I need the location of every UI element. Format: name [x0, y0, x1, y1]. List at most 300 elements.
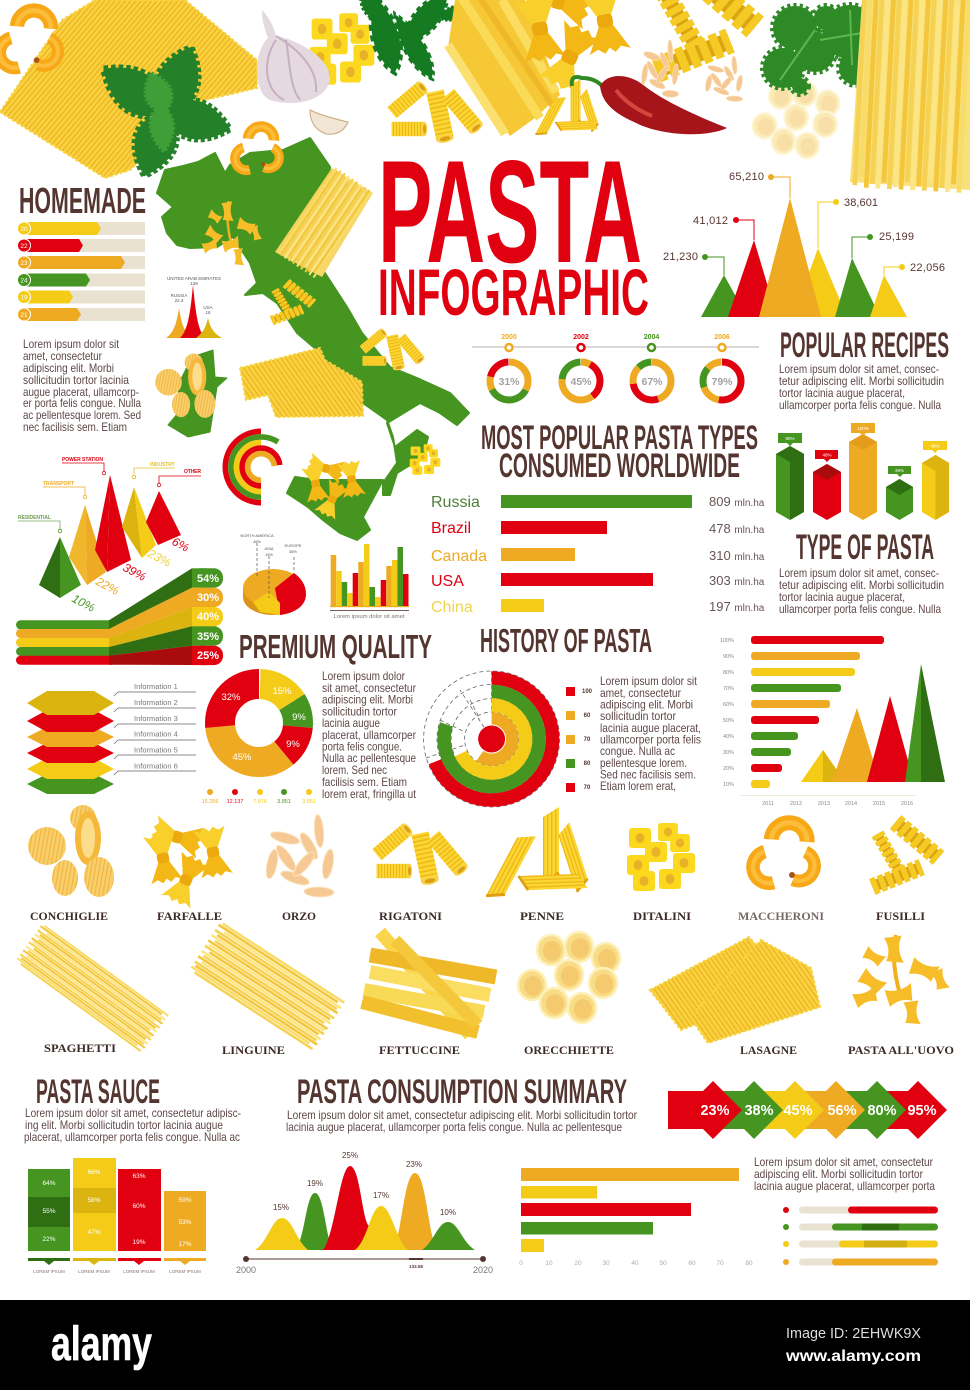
country values: 809 mln.ha [709, 494, 765, 509]
text block: tetur adipiscing elit. Morbi sollicitudin [779, 578, 944, 592]
text block: placerat, ullamcorper porta felis congue. Nulla ac [24, 1130, 240, 1144]
donut legend: 7.876 [253, 799, 267, 805]
chart: small country peaks: 22.3 [175, 298, 184, 303]
peak values: 65,210 [729, 171, 764, 183]
chart: donut percentages: 9% [292, 712, 306, 723]
fusilli on map [272, 283, 313, 321]
Sardinia [168, 350, 227, 437]
label: conchiglie: CONCHIGLIE [30, 909, 108, 923]
donut 2004 [633, 362, 671, 400]
chart: diamond arrows with percentages: 23% [700, 1102, 730, 1119]
chart: bell curves: 17% [373, 1191, 389, 1200]
map of Italy [155, 121, 469, 540]
progress arrows: 20 [20, 226, 28, 233]
label: pasta all'uovo: PASTA ALL'UOVO [848, 1043, 954, 1057]
percent axis: 80% [723, 670, 734, 676]
percent axis: 10% [723, 782, 734, 788]
icon: pasta all'uovo [852, 935, 950, 1026]
value tags [778, 423, 947, 477]
chart: horizontal bars [519, 1168, 753, 1267]
panel: popular recipes [779, 326, 949, 412]
lasagne sheets [0, 0, 257, 178]
icon: fusilli [872, 822, 938, 887]
text block: bottom right [754, 1155, 935, 1193]
mainland Italy [157, 138, 469, 495]
chart: small country peaks: 139 [190, 281, 198, 286]
label: orecchiette: ORECCHIETTE [524, 1043, 614, 1057]
text block: premium quality: lorem erat, fringilla ut [322, 787, 417, 801]
text block: history: Etiam lorem erat, [600, 779, 676, 793]
fettuccine top [448, 0, 560, 136]
text block: premium quality [322, 669, 417, 801]
chart: mountain peaks with values [663, 171, 945, 317]
pyramid percentages: 22% [93, 574, 122, 598]
text block [24, 1106, 241, 1144]
yellow pyramid [122, 487, 156, 558]
title: INFOGRAPHIC [378, 255, 649, 329]
text block: Lorem ipsum dolor sit amet, consectetur adipisc- [25, 1106, 241, 1120]
year axis: 2013 [818, 801, 830, 807]
progress arrows: 19 [20, 294, 28, 302]
text block [286, 1108, 637, 1134]
chart: timeline of small donuts: 2004 [644, 334, 659, 341]
title [378, 130, 649, 329]
chart: stacked columns: 66% [87, 1169, 101, 1176]
chart: stacked columns: 22% [42, 1236, 56, 1243]
radial legend: 70 [584, 785, 591, 791]
text block: premium quality: lacinia augue [322, 716, 380, 730]
chart: 3D pie: ASIA [264, 546, 274, 551]
peak values: 25,199 [879, 231, 914, 243]
text block: bottom right: Lorem ipsum dolor sit amet, consectetur [754, 1155, 933, 1169]
icon: farfalle [143, 815, 233, 909]
country values: 303 mln.ha [709, 573, 765, 588]
text block: ac pellentesque lorem. Sed [23, 408, 141, 422]
pyramid percentages: 10% [70, 591, 98, 615]
column tabs [28, 1258, 206, 1265]
icon: rigatoni [372, 822, 470, 886]
text block: ullamcorper porta felis congue. Nulla [779, 398, 941, 412]
donut percentages: 79% [711, 376, 733, 388]
percent axis: 60% [723, 702, 734, 708]
chart: horizontal bars: 60 [688, 1260, 696, 1267]
text block: history: ullamcorper porta felis [600, 732, 701, 746]
chart: 3D pie: 46% [253, 539, 261, 544]
chart: bell curves: 19% [307, 1179, 323, 1188]
donut 2002 [562, 362, 600, 400]
text block: history: sollicitudin tortor [600, 709, 676, 723]
chart: small country peaks: 16 [205, 310, 211, 315]
panel: pasta sauce [24, 1073, 241, 1274]
panel: pasta consumption summary [236, 1073, 637, 1275]
heading: most popular [481, 419, 758, 485]
text block: Lorem ipsum dolor sit amet, consectetur adipiscing elit. Morbi sollicitudin tortor [287, 1108, 637, 1122]
radial legend: 100 [582, 689, 593, 695]
chart: 3D pie [240, 533, 306, 615]
chart: column bars: Lorem ipsum dolor sit amet [334, 614, 405, 620]
value tags: 39% [895, 468, 904, 473]
icon: orzo [264, 814, 336, 898]
column labels: LOREM IPSUM [169, 1269, 201, 1274]
year axis: 2015 [873, 801, 885, 807]
chart: small country peaks: USA [203, 305, 213, 310]
percent axis: 20% [723, 766, 734, 772]
chart: 3D pie: NORTH AMERICA [240, 533, 274, 538]
text block: premium quality: Nulla ac pellentesque [322, 751, 416, 765]
percent axis: 30% [723, 750, 734, 756]
chart: isometric bars [776, 423, 949, 520]
chart: horizontal bars: 40 [631, 1260, 639, 1267]
chart: timeline of small donuts: 2000 [501, 334, 517, 341]
chart: donut percentages [202, 684, 316, 805]
text block: premium quality: Lorem ipsum dolor [322, 669, 405, 683]
chart: stacked converging bands: 40% [197, 611, 219, 623]
peak values: 41,012 [693, 215, 728, 227]
heading: consumption summary: PASTA CONSUMPTION SUMMARY [297, 1073, 627, 1111]
chart: timeline of small donuts [472, 334, 759, 400]
column labels [33, 1269, 201, 1274]
information labels: Information 1 [134, 682, 178, 691]
text block: Lorem ipsum dolor sit [23, 337, 120, 351]
donut percentages: 45% [570, 376, 592, 388]
chart: donut percentages: 9% [286, 739, 300, 750]
chart: concentric half rings [225, 431, 280, 503]
donut legend: 3.851 [302, 799, 316, 805]
conchiglie on Sardinia [155, 354, 215, 418]
chart: bell curves: 23% [406, 1160, 422, 1169]
information labels: Information 5 [134, 746, 178, 754]
triangles [801, 664, 945, 782]
footer logo: alamy [51, 1318, 152, 1371]
percent axis: 100% [720, 638, 734, 644]
text block: tortor lacinia augue placerat, [779, 590, 905, 604]
radial legend: 80 [584, 761, 591, 767]
chart: stacked columns [28, 1158, 206, 1274]
text block: history: adipiscing elit. Morbi [600, 698, 693, 712]
value tags: 100% [857, 426, 869, 431]
Sicily [287, 477, 383, 540]
text block: premium quality: porta felis congue. [322, 740, 402, 754]
donut 2000 [490, 362, 528, 400]
chart: diamond arrows with percentages: 80% [868, 1102, 896, 1119]
progress arrows: 24 [20, 278, 28, 284]
chart: slider bars [783, 1206, 938, 1266]
ditalini on map [410, 444, 440, 475]
garlic bulb [257, 10, 330, 103]
parsley [763, 5, 895, 94]
heading: premium quality: PREMIUM QUALITY [239, 628, 432, 665]
text block: history: amet, consectetur [600, 686, 681, 700]
information labels: Information 6 [134, 762, 178, 770]
chart: horizontal bars: 80 [745, 1260, 753, 1267]
penne top [535, 79, 600, 139]
percent axis: 50% [723, 718, 734, 724]
icon: maccheroni [748, 815, 820, 885]
radial legend [566, 687, 593, 792]
chart: stacked converging bands: 54% [197, 573, 219, 585]
country values: 478 mln.ha [709, 521, 765, 536]
column labels: LOREM IPSUM [123, 1269, 155, 1274]
value tags: 80% [785, 436, 795, 441]
country values: 197 mln.ha [709, 599, 765, 614]
year axis: 2012 [790, 801, 802, 807]
chart: diamond arrows with percentages: 38% [744, 1102, 774, 1119]
chart: bell curves: 10% [440, 1208, 456, 1217]
text block: premium quality: lorem. Sed nec [322, 763, 387, 777]
chart: diamond arrows with percentages: 45% [784, 1102, 812, 1119]
text block: premium quality: adipiscing elit. Morbi [322, 692, 413, 706]
horizontal bars [751, 636, 884, 788]
chart: small country peaks: UNITED ARAB EMIRATES [167, 276, 221, 281]
chart: column bars [330, 544, 409, 620]
donut legend [202, 789, 316, 805]
sector labels: OTHER [184, 469, 201, 475]
chart: stacked columns: 17% [178, 1241, 192, 1248]
label: orzo: ORZO [282, 909, 316, 923]
heading: homemade: HOMEMADE [19, 180, 146, 221]
peak values: 22,056 [910, 262, 945, 274]
peak leader lines [702, 174, 905, 275]
peak values: 21,230 [663, 251, 698, 263]
text block: history: congue. Nulla ac [600, 744, 675, 758]
footer url: www.alamy.com [785, 1348, 921, 1365]
chart: stacked converging bands [16, 568, 223, 665]
donut percentages [498, 376, 733, 388]
footer bar [0, 1300, 970, 1390]
text block: history [600, 674, 701, 793]
chart: horizontal bars: 10 [545, 1260, 553, 1267]
maccheroni top left [0, 4, 63, 70]
text block [779, 566, 944, 616]
country labels: Russia [431, 494, 480, 511]
orzo top [640, 39, 680, 98]
spaghetti top right [850, 0, 970, 193]
farfalle on Sicily [301, 453, 366, 520]
chart: horizontal bars: 20 [574, 1260, 582, 1267]
icon: ditalini [627, 823, 695, 891]
chart: horizontal bars: 0 [519, 1260, 523, 1267]
icon: conchiglie [28, 805, 114, 897]
heading: most popular: CONSUMED WORLDWIDE [499, 447, 740, 485]
chart: donut percentages: 15% [272, 686, 292, 697]
text block: ing elit. Morbi sollicitudin tortor lacinia augue [25, 1118, 223, 1132]
timeline axis: 133.58 [409, 1264, 423, 1269]
chart: donut percentages: 32% [221, 692, 241, 703]
label: penne: PENNE [520, 909, 564, 923]
text block: lacinia augue placerat, ullamcorper porta felis congue. Nulla ac pellentesque [286, 1120, 622, 1134]
text block: ullamcorper porta felis congue. Nulla [779, 602, 941, 616]
title: PASTA [378, 130, 642, 293]
label: fusilli: FUSILLI [876, 909, 925, 923]
panel: pasta catalogue [16, 805, 954, 1057]
arugula [354, 0, 472, 83]
chart: horizontal bars: 70 [716, 1260, 724, 1267]
label: linguine: LINGUINE [222, 1043, 285, 1057]
maccheroni on map [232, 121, 283, 172]
information labels: Information 2 [134, 698, 178, 707]
sector labels: POWER STATION [62, 457, 103, 463]
country labels: USA [431, 573, 464, 590]
text block: premium quality: sit amet, consectetur [322, 681, 416, 695]
chart: stacked columns: 63% [132, 1173, 146, 1180]
information leader lines [114, 692, 196, 775]
country bars [501, 495, 692, 612]
label: maccheroni: MACCHERONI [738, 909, 824, 923]
chart: stacked converging bands: 25% [197, 650, 219, 662]
icon: lasagne [650, 937, 820, 1043]
chart: stacked converging bands: 30% [197, 592, 219, 604]
chart: 3D pie: EUROPE [285, 543, 302, 548]
sector labels: TRANSPORT [43, 481, 74, 487]
percent axis: 90% [723, 654, 734, 660]
sector labels: INDUSTRY [150, 462, 176, 468]
text block: history: Lorem ipsum dolor sit [600, 674, 698, 688]
icon: orecchiette [518, 932, 620, 1023]
text block: nec facilisis sem. Etiam [23, 420, 127, 434]
chart: 3D pyramids with sector labels [18, 457, 201, 615]
text block [23, 337, 141, 434]
label: fettuccine: FETTUCCINE [379, 1043, 460, 1057]
country labels [431, 494, 487, 616]
chart: bell curves: 15% [273, 1203, 289, 1212]
information labels: Information 4 [134, 730, 178, 738]
label: spaghetti: SPAGHETTI [44, 1041, 116, 1055]
chart: bell curves: 2020 [473, 1265, 493, 1275]
donut legend: 3.851 [277, 799, 291, 805]
small red pyramid [146, 491, 181, 545]
text block [779, 362, 944, 412]
pyramid callouts [18, 463, 201, 533]
country labels: China [431, 599, 473, 616]
text block: history: Sed nec facilisis sem. [600, 768, 696, 782]
label: farfalle: FARFALLE [157, 909, 222, 923]
radial legend: 60 [584, 713, 591, 719]
percent axis: 40% [723, 734, 734, 740]
icon: linguine [190, 922, 344, 1050]
chart: stacked columns: 64% [42, 1180, 56, 1187]
progress arrows: 22 [20, 243, 28, 250]
pyramid percentages: 23% [145, 546, 174, 570]
panel: most popular pasta types [431, 419, 765, 616]
progress arrows [18, 222, 145, 321]
icon: fettuccine [362, 932, 496, 1035]
orzo top right [704, 56, 744, 102]
chili pepper [572, 76, 727, 134]
orange pyramid [69, 505, 106, 585]
panel: type of pasta [779, 528, 944, 616]
heading: history of pasta: HISTORY OF PASTA [480, 622, 652, 659]
country labels: Brazil [431, 520, 471, 537]
text block: sollicitudin tortor lacinia [23, 373, 129, 387]
basil leaves [91, 39, 235, 183]
footer image id: Image ID: 2EHWK9X [786, 1325, 921, 1342]
information labels: Information 3 [134, 714, 178, 723]
country labels: Canada [431, 548, 487, 565]
chart: timeline bars with triangles [720, 636, 945, 807]
text block: premium quality: placerat, ullamcorper [322, 728, 416, 742]
column labels: LOREM IPSUM [78, 1269, 110, 1274]
chart: stacked columns: 53% [178, 1219, 192, 1226]
chart: stacked columns: 47% [87, 1229, 101, 1236]
text block: bottom right: lacinia augue placerat, ullamcorper porta [754, 1179, 935, 1193]
text block: adipiscing elit. Morbi [23, 361, 114, 375]
heading: pasta sauce: PASTA SAUCE [36, 1073, 160, 1111]
panel: homemade [18, 180, 146, 434]
peak values [663, 171, 945, 274]
text block: Lorem ipsum dolor sit amet, consec- [779, 566, 939, 580]
garlic clove [310, 110, 348, 134]
chart: stacked columns: 19% [132, 1239, 146, 1246]
chart: diamond arrows with percentages: 95% [908, 1102, 936, 1119]
year axis: 2014 [845, 801, 857, 807]
progress arrows: 23 [20, 260, 28, 267]
country values: 310 mln.ha [709, 548, 765, 563]
green pyramid [39, 537, 81, 598]
chart: stacked converging bands: 35% [197, 631, 219, 643]
chart: timeline of small donuts: 2002 [573, 334, 589, 341]
label: ditalini: DITALINI [633, 909, 691, 923]
chart: layered hexagons [27, 682, 196, 794]
donut legend: 15.256 [202, 799, 218, 805]
icon: penne [486, 807, 590, 903]
chart: small country peaks [166, 276, 222, 338]
text block: history: pellentesque lorem. [600, 756, 687, 770]
chart: timeline of small donuts: 2006 [714, 334, 730, 341]
timeline axis [243, 1256, 486, 1269]
chart: radial progress [424, 671, 560, 807]
donut percentages: 67% [641, 376, 663, 388]
rigatoni on map [360, 327, 426, 371]
text block: history: lacinia augue placerat, [600, 721, 701, 735]
chart: horizontal bars: 30 [602, 1260, 610, 1267]
donut percentages: 31% [498, 376, 520, 388]
rigatoni top [387, 80, 485, 144]
chart: 3D pie: 15% [265, 552, 273, 557]
sector labels: RESIDENTIAL [18, 515, 51, 521]
donut legend: 12.137 [227, 799, 243, 805]
text block: Lorem ipsum dolor sit amet, consec- [779, 362, 939, 376]
label: lasagne: LASAGNE [740, 1043, 797, 1057]
text block: bottom right: adipiscing elit. Morbi sollicitudin tortor [754, 1167, 923, 1181]
pasta all'uovo on map [202, 201, 262, 266]
text block: tortor lacinia augue placerat, [779, 386, 905, 400]
information labels [134, 682, 178, 770]
radial legend: 70 [584, 737, 591, 743]
country values [709, 494, 765, 614]
text block: augue placerat, ullamcorp- [23, 385, 139, 399]
decorative top ingredients band [0, 0, 970, 193]
chart: stacked columns: 58% [87, 1197, 101, 1204]
chart: horizontal bars: 50 [659, 1260, 667, 1267]
chart: stacked columns: 59% [178, 1197, 192, 1204]
icon: spaghetti [16, 924, 168, 1052]
pyramid percentages: 6% [170, 534, 192, 555]
text block: er porta felis congue. Nulla [23, 396, 141, 410]
chart: diamond arrows with percentages [668, 1081, 947, 1139]
ditalini [310, 13, 374, 85]
panel: history of pasta [424, 622, 701, 807]
text block: amet, consectetur [23, 349, 102, 363]
chart: diamond arrows with percentages: 56% [828, 1102, 856, 1119]
percent axis [720, 638, 734, 788]
value tags: 48% [930, 444, 940, 448]
lasagne on map [240, 348, 363, 417]
donut 2006 [703, 362, 741, 400]
year axis: 2016 [901, 801, 913, 807]
farfalle top [514, 0, 631, 95]
year axis [740, 795, 915, 807]
chart: 3D pie: 36% [289, 549, 297, 554]
